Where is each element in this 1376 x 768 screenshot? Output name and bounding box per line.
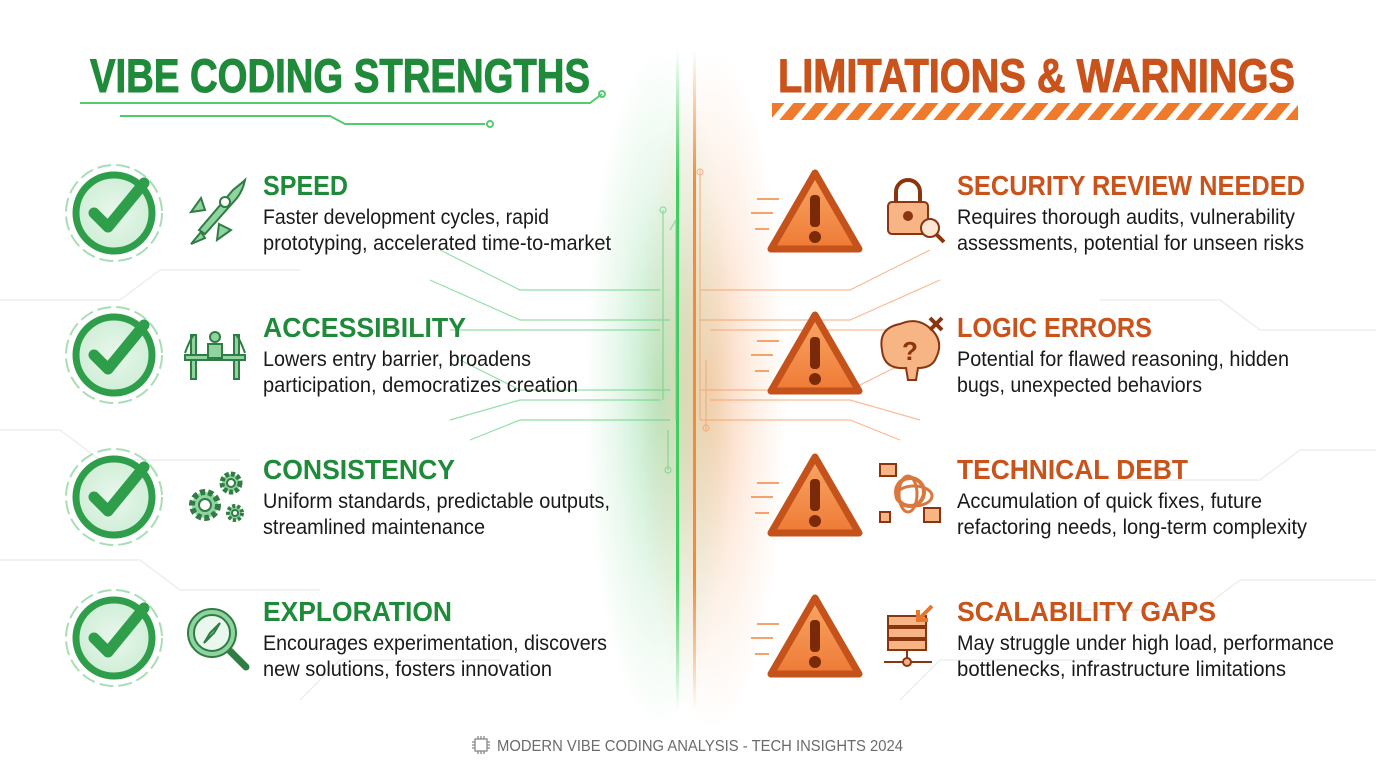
footer: MODERN VIBE CODING ANALYSIS - TECH INSIGHTS 2024 [497,738,903,755]
item: security: assessments, potential for unseen risks [957,232,1304,255]
icon: warning [751,457,859,533]
item: speed: prototyping, accelerated time-to-market [263,232,611,255]
item: technical debt: Accumulation of quick fixes, future [957,490,1262,513]
item: scalability: bottlenecks, infrastructure limitations [957,658,1286,681]
item: consistency: streamlined maintenance [263,516,485,539]
right title [772,49,1298,120]
left title: VIBE CODING STRENGTHS [90,49,590,102]
right items [751,170,1334,681]
icon: chip [472,736,490,754]
item: scalability: SCALABILITY GAPS [957,596,1216,627]
center divider glow [430,50,940,730]
icon: check [66,165,162,261]
item: logic errors: LOGIC ERRORS [957,312,1152,343]
item: logic errors [751,312,1289,397]
item: security: Requires thorough audits, vulnerability [957,206,1295,229]
icon: warning [751,598,859,674]
item: speed: Faster development cycles, rapid [263,206,549,229]
icon: compass magnifier [188,609,246,667]
item: exploration: new solutions, fosters innovation [263,658,552,681]
item: technical debt: TECHNICAL DEBT [957,454,1188,485]
icon: rocket [191,180,245,244]
icon: check [66,449,162,545]
icon: bridge [185,332,245,379]
item: technical debt [751,454,1307,539]
item: exploration: EXPLORATION [263,596,452,627]
item: scalability: May struggle under high load, performance [957,632,1334,655]
item: accessibility [66,307,578,403]
right title: LIMITATIONS & WARNINGS [778,49,1295,102]
icon: gears [192,474,242,520]
item: speed [66,165,611,261]
item: accessibility: participation, democratizes creation [263,374,578,397]
item: consistency [66,449,610,545]
item: security [751,170,1305,255]
left title [80,49,605,127]
item: speed: SPEED [263,170,348,201]
icon: tangled [880,464,940,522]
item: accessibility: Lowers entry barrier, broadens [263,348,531,371]
item: exploration [66,590,607,686]
item: consistency: CONSISTENCY [263,454,455,485]
item: security: SECURITY REVIEW NEEDED [957,170,1305,201]
icon: server [884,606,932,666]
icon: lock [888,180,944,242]
background circuit lines [0,270,1376,700]
left items [66,165,611,686]
item: scalability [751,596,1334,681]
item: consistency: Uniform standards, predictable outputs, [263,490,610,513]
item: exploration: Encourages experimentation, discovers [263,632,607,655]
icon: brain [881,318,942,380]
item: logic errors: bugs, unexpected behaviors [957,374,1202,397]
icon: brain: ? [902,336,918,366]
item: logic errors: Potential for flawed reasoning, hidden [957,348,1289,371]
icon: warning [751,173,859,249]
icon: warning [751,315,859,391]
icon: check [66,590,162,686]
item: accessibility: ACCESSIBILITY [263,312,466,343]
item: technical debt: refactoring needs, long-term complexity [957,516,1307,539]
icon: check [66,307,162,403]
